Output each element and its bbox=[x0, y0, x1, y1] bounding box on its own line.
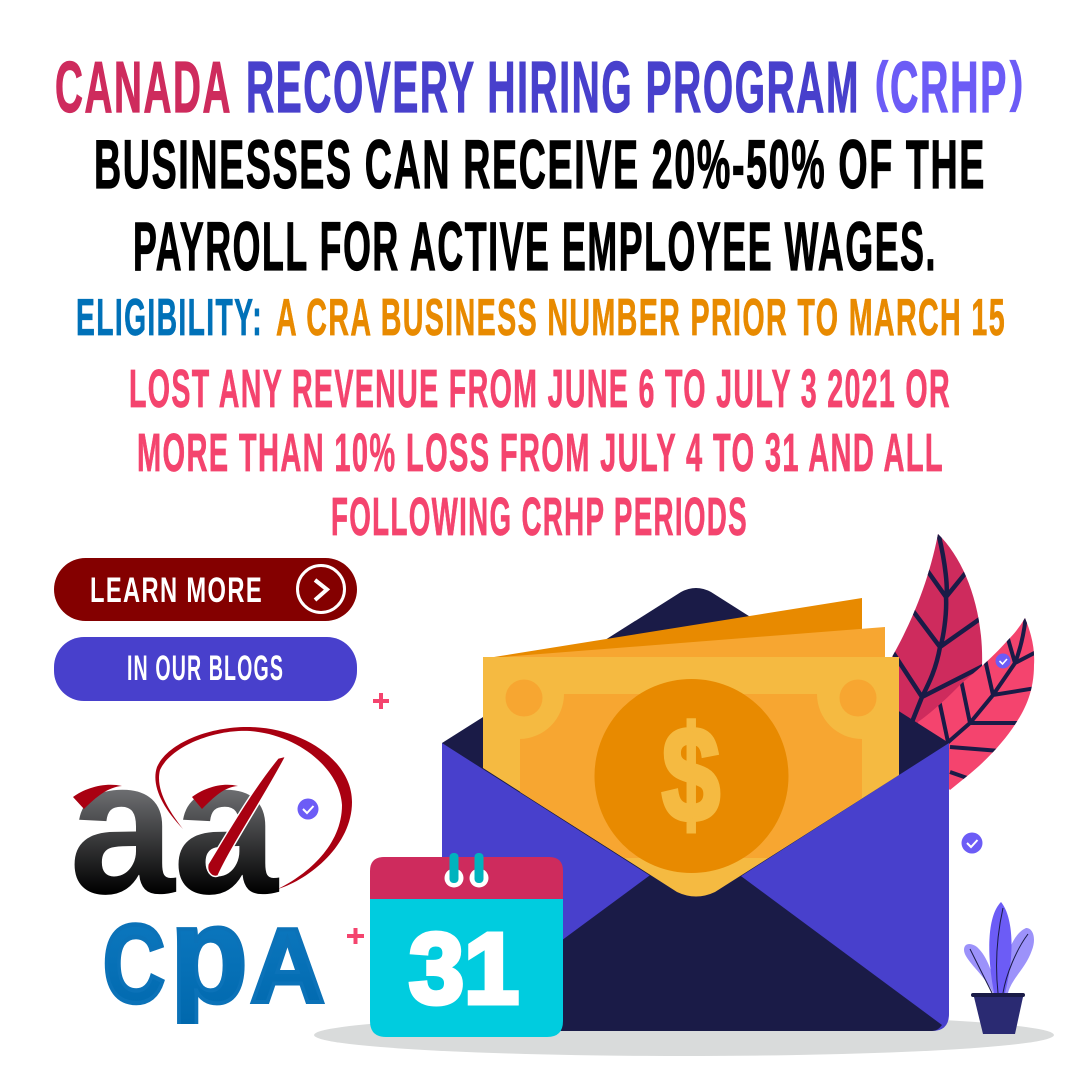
illustration: envelope with banknotes bbox=[439, 588, 949, 1031]
logo: AA CPA: a bbox=[173, 719, 279, 934]
logo: AA CPA: p bbox=[170, 878, 248, 1032]
logo: AA CPA: a bbox=[69, 719, 176, 934]
icon: calendar bbox=[370, 853, 563, 1037]
button: learn more bbox=[54, 558, 357, 621]
front leaf bbox=[918, 615, 1040, 790]
illustration: potted plant bbox=[964, 902, 1034, 1034]
back leaf bbox=[892, 534, 982, 724]
title: Canada Recovery Hiring Program: ( bbox=[875, 50, 888, 112]
banknote inner panel bbox=[520, 694, 862, 858]
revenue loss conditions bbox=[129, 359, 951, 547]
icon: check badge beside envelope bbox=[962, 832, 982, 854]
ground shadow bbox=[314, 1014, 1054, 1056]
subtitle: payroll subsidy statement bbox=[94, 126, 986, 285]
button: in our blogs bbox=[54, 637, 357, 701]
banknote corner dots bbox=[506, 680, 876, 716]
icon: plus sign upper bbox=[373, 693, 389, 709]
front banknote bbox=[483, 657, 899, 896]
button: in our blogs: IN OUR BLOGS bbox=[127, 649, 284, 688]
envelope lower fold bbox=[439, 842, 942, 1031]
banknote medallion bbox=[594, 679, 788, 873]
button: learn more: LEARN MORE bbox=[90, 571, 263, 610]
icon: plus sign lower bbox=[347, 928, 364, 944]
envelope back flap bbox=[442, 588, 949, 1000]
icon: calendar: 31 bbox=[409, 913, 519, 1025]
title: Canada Recovery Hiring Program: CANADA bbox=[55, 48, 232, 128]
envelope body bbox=[442, 743, 949, 1031]
title: Canada Recovery Hiring Program: ) bbox=[1010, 50, 1023, 112]
middle banknote bbox=[502, 627, 885, 657]
dollar sign: $ bbox=[662, 699, 720, 850]
logo: AA CPA: A bbox=[250, 907, 325, 1025]
eligibility line: ELIGIBILITY: bbox=[76, 289, 263, 347]
icon: check badge on leaf bbox=[996, 654, 1010, 668]
icon: check badge near logo bbox=[298, 798, 318, 820]
logo: AA CPA: C bbox=[103, 903, 165, 1026]
logo: AA CPA bbox=[69, 719, 352, 1032]
back banknote bbox=[494, 598, 862, 657]
illustration: leaves bbox=[886, 532, 1040, 790]
